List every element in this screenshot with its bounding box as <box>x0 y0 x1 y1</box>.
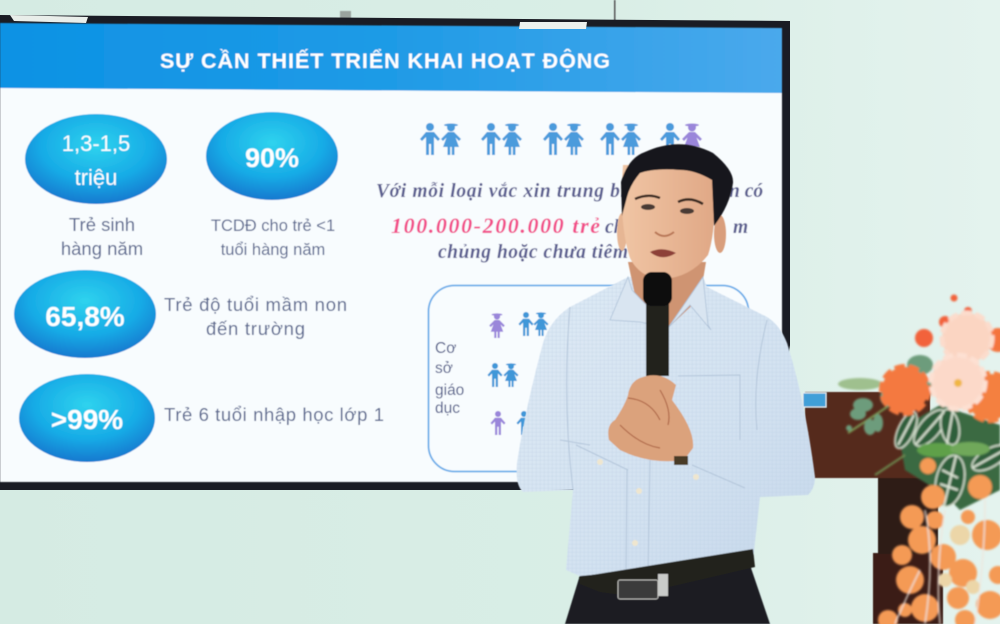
microphone <box>643 272 672 376</box>
panel: title band <box>0 23 782 93</box>
message text <box>376 181 763 263</box>
message text: Với mỗi loại vắc xin trung bì <box>376 181 626 202</box>
stat: births: triệu <box>75 165 117 190</box>
stat: births <box>25 114 167 204</box>
caption: births <box>61 214 143 259</box>
screen bezel <box>0 15 790 490</box>
caption: vaccination rate: TCDĐ cho trẻ <1 <box>211 217 335 235</box>
message text: m <box>733 217 748 238</box>
face <box>622 165 715 279</box>
label: education facilities: giáo <box>435 382 464 399</box>
shirt <box>517 277 815 576</box>
label: education facilities: Cơ <box>435 340 456 357</box>
message text: 100.000-200.000 trẻ <box>391 213 600 238</box>
wristwatch <box>674 456 688 465</box>
facial features <box>635 196 703 257</box>
flower arrangement <box>838 294 1000 624</box>
stat: preschool <box>14 270 156 358</box>
caption: vaccination rate <box>211 217 335 259</box>
trousers <box>565 565 770 624</box>
caption: grade one: Trẻ 6 tuổi nhập học lớp 1 <box>164 404 384 425</box>
hanging strands <box>895 500 985 624</box>
dahlias <box>882 367 928 413</box>
ceiling fixtures <box>340 0 616 21</box>
stat: preschool: 65,8% <box>45 301 125 332</box>
neck <box>628 262 706 328</box>
lectern <box>803 392 943 624</box>
icon row: children <box>420 123 702 155</box>
caption: preschool <box>164 294 347 339</box>
caption: preschool: đến trường <box>206 318 305 339</box>
panel: education facilities <box>428 286 748 472</box>
label: education facilities <box>435 340 464 417</box>
striped leaves <box>890 405 1000 509</box>
stat: grade one: >99% <box>51 404 123 435</box>
caption: births: Trẻ sinh <box>69 214 135 235</box>
ears <box>617 213 627 251</box>
collar <box>610 277 711 330</box>
lectern plate <box>803 393 826 407</box>
pale blooms <box>938 525 980 594</box>
belt <box>579 549 755 599</box>
shirt buttons <box>597 459 699 546</box>
stat: vaccination rate <box>206 112 338 200</box>
label: education facilities: dục <box>435 400 460 417</box>
caption: vaccination rate: tuổi hàng năm <box>221 241 325 259</box>
hair <box>621 144 733 226</box>
small blossoms <box>878 458 1000 624</box>
stat: vaccination rate: 90% <box>245 143 299 173</box>
foliage backdrop <box>898 405 1000 510</box>
caption: preschool: Trẻ độ tuổi mầm non <box>164 294 347 315</box>
hands <box>608 375 693 461</box>
title: SỰ CẦN THIẾT TRIỂN KHAI HOẠT ĐỘNG <box>160 48 610 73</box>
message text: n có <box>729 181 763 202</box>
ceiling strips on bezel <box>10 15 587 29</box>
speaker <box>517 144 815 624</box>
message text: ch <box>605 217 624 238</box>
stat: grade one <box>19 374 155 462</box>
shirt folds <box>560 307 767 574</box>
pale sprigs <box>838 378 882 390</box>
message text: chủng hoặc chưa tiêm <box>438 242 628 263</box>
icons: children in facilities <box>488 312 548 435</box>
stat: births: 1,3-1,5 <box>62 131 130 156</box>
caption: births: hàng năm <box>61 238 143 259</box>
shirt check texture <box>517 277 815 576</box>
panel: slide <box>0 23 782 482</box>
label: education facilities: sở <box>435 360 453 377</box>
eucalyptus <box>846 355 936 475</box>
